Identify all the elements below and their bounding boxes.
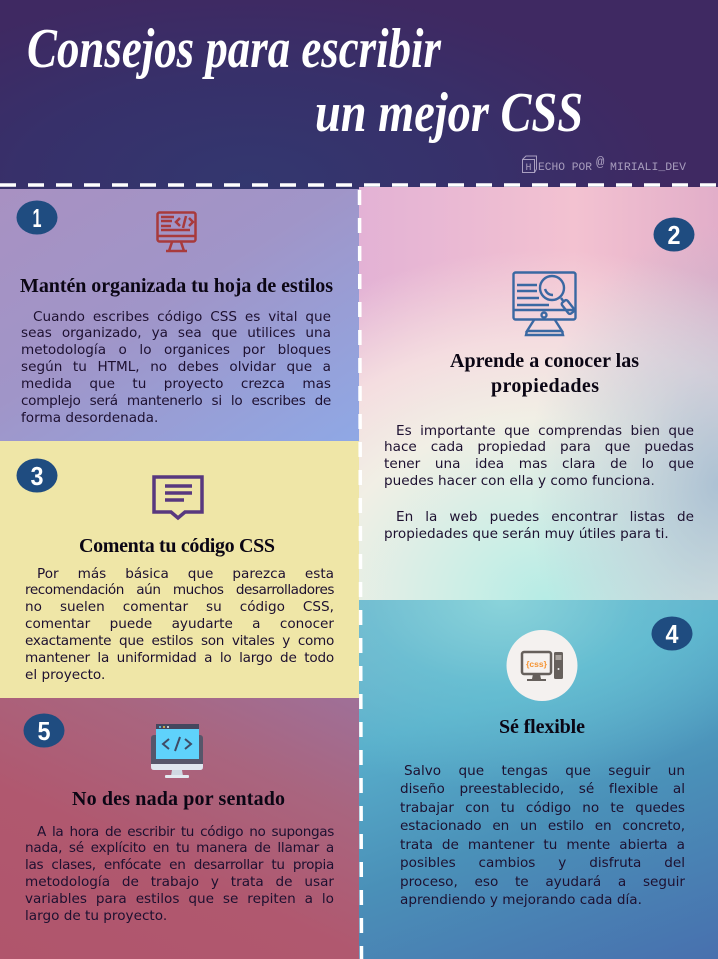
body text: metodología de trabajo y trata de usar [25,874,334,890]
body text: el proyecto. [25,667,105,683]
body text: aprendiendo y mejorando cada día. [400,892,642,908]
body text: no suelen comentar su código CSS, [25,599,334,615]
body text: complejo será mantenerlo si lo escribes de [21,393,331,409]
panel 4: flexible [359,600,718,959]
body text: Es importante que comprendas bien que [396,422,694,438]
body text: exactamente que estilos son vitales y como [25,633,334,649]
credit line: H [525,163,532,174]
body text: estacionado en un estilo en concreto, [400,818,685,834]
body text [25,566,334,683]
body text: puedes hacer con ella y como funciona. [384,473,655,489]
body text: forma desordenada. [21,410,158,426]
body text: diseño preestablecido, sé flexible al [400,781,685,797]
body text: metodología o lo organices por bloques [21,342,331,358]
title [27,18,583,144]
body text: hace cada propiedad para que puedas [384,439,694,455]
icon: comment bubble [152,475,204,520]
icon: desktop code window [151,724,203,778]
body text [25,824,334,924]
badge 2 [654,218,694,252]
heading: propiedades [491,375,599,397]
icon: css computer in circle [506,630,578,701]
body text: nada, sé explícito en tu manera de llamar a [25,840,334,856]
title: un mejor CSS [315,82,583,144]
body text: trabajar con tu código no te quedes [400,800,685,816]
credit line [522,155,686,174]
heading: Sé flexible [499,716,585,738]
body text: En la web puedes encontrar listas de [396,509,694,525]
badge 3: 3 [30,461,44,491]
body text: Salvo que tengas que seguir un [404,763,685,779]
body text: A la hora de escribir tu código no supongas [37,824,334,840]
body text: las clases, enfócate en desarrollar tu propia [25,857,334,873]
badge 4 [652,616,692,650]
badge 1: 1 [32,203,42,233]
heading: Aprende a conocer las [450,350,639,372]
body text [400,763,685,908]
panel 1: organizada [0,189,359,441]
panel 3: comenta [0,441,359,698]
badge 1 [16,200,58,234]
body text: variables para estilos que se repiten a lo [25,891,334,907]
body text: comentar puede ayudarte a conocer [25,616,334,632]
heading: Mantén organizada tu hoja de estilos [20,275,333,297]
heading: Comenta tu código CSS [79,535,275,557]
body text: mantener la uniformidad a lo largo de todo [25,650,334,666]
body text: según tu HTML, no debes olvidar que a [21,359,331,375]
credit line: ECHO POR [538,162,592,174]
title: Consejos para escribir [27,18,442,80]
body text: recomendación aún muchos desarrolladores [25,582,334,598]
badge 4: 4 [666,619,679,649]
icon: code monitor [156,211,197,252]
body text: posibles cambios y disfruta del [400,855,685,871]
badge 5: 5 [38,716,50,746]
credit line: @ [596,155,605,171]
panel 5: no des nada por sentado [0,698,360,959]
body text: propiedades que serán muy útiles para ti. [384,526,669,542]
body text: medida que tu proyecto crezca mas [21,376,331,392]
panel 2: propiedades [359,187,718,600]
body text: trata de mantener tu mente abierta a [400,837,685,853]
badge 5 [24,714,64,748]
body text [21,308,331,426]
badge 2: 2 [668,220,680,250]
body text: seas organizado, ya sea que utilices una [21,325,331,341]
badge 3 [16,458,58,492]
body text: Cuando escribes código CSS es vital que [33,308,331,324]
icon: monitor with magnifier [512,271,577,336]
body text: Por más básica que parezca esta [37,566,334,582]
credit line: MIRIALI_DEV [610,162,686,174]
body text: proceso, eso te ayudará a seguir [400,874,685,890]
body text: largo de tu proyecto. [25,908,167,924]
icon: css computer in circle: {css} [526,659,548,669]
body text [384,422,694,542]
heading: No des nada por sentado [72,788,285,810]
body text: tener una idea mas clara de lo que [384,456,694,472]
heading [450,350,639,397]
header banner [0,0,718,190]
